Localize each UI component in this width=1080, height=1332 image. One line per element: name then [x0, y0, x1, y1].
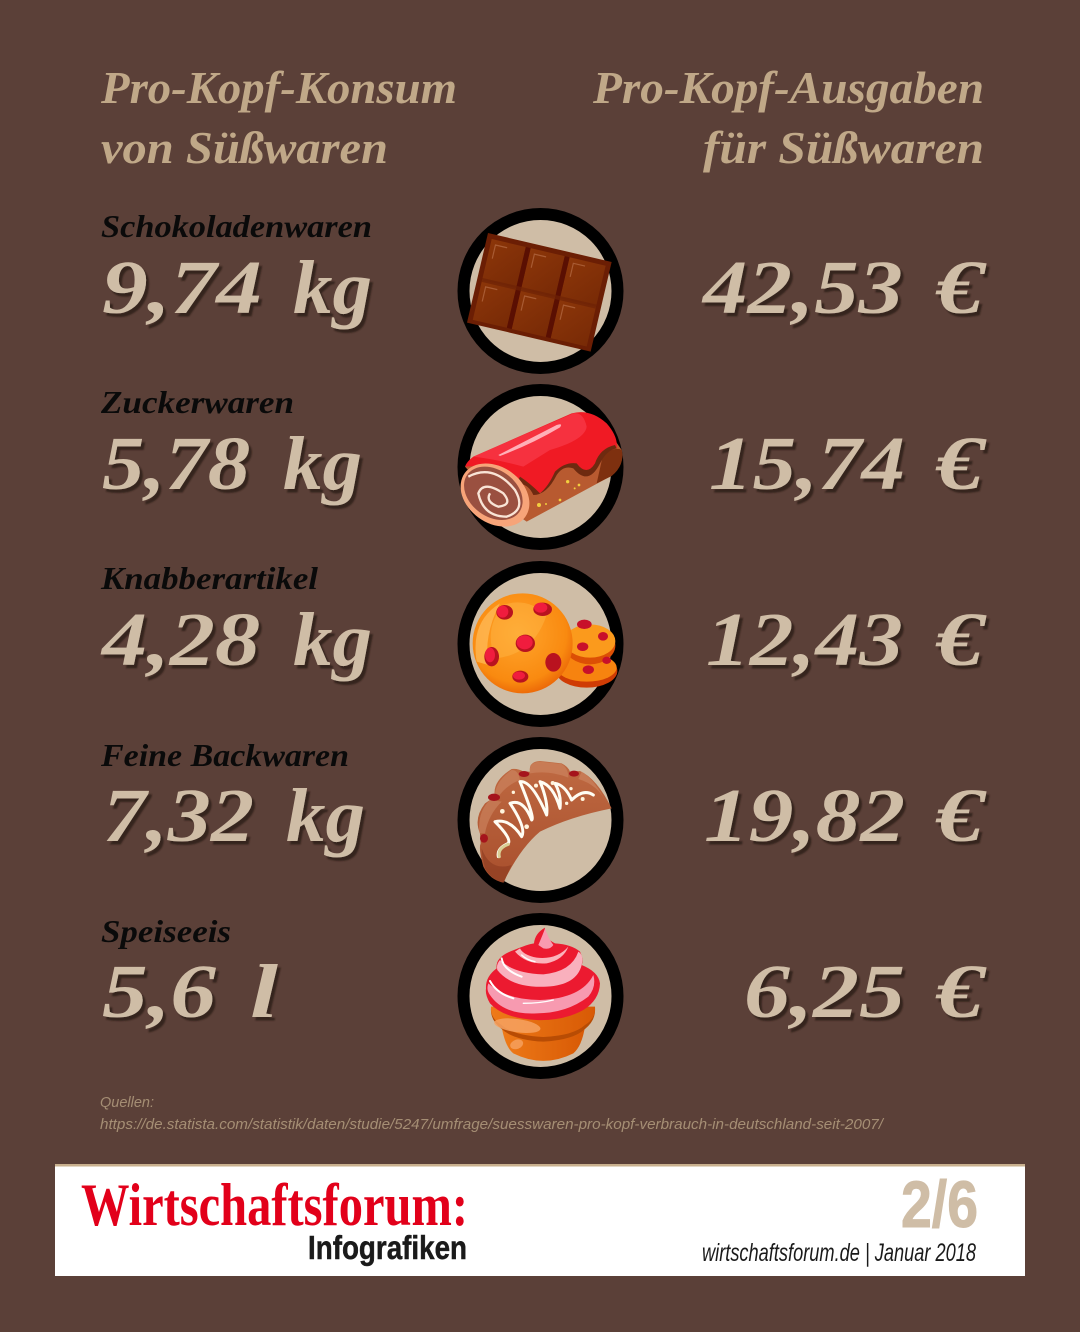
spending value: € — [935, 422, 988, 506]
consumption value — [102, 246, 372, 330]
icon: chocolate bar — [464, 214, 618, 368]
consumption value: kg — [283, 422, 362, 506]
icon: pastry — [464, 743, 618, 897]
spending value — [704, 774, 988, 858]
spending value: € — [935, 246, 988, 330]
spending value — [701, 246, 988, 330]
spending value: 15,74 — [709, 422, 905, 506]
spending value: € — [935, 598, 988, 682]
subtitle: Infografiken — [308, 1229, 467, 1266]
heading: spending: Pro-Kopf-Ausgaben — [592, 62, 984, 113]
page number: 2/6 — [901, 1167, 978, 1241]
consumption value: kg — [293, 598, 372, 682]
heading: consumption: von Süßwaren — [101, 122, 388, 173]
consumption value — [100, 598, 372, 682]
sources: https://de.statista.com/statistik/daten/studie/5247/umfrage/suesswaren-pro-kopf-verbrauch-in-deutschland-seit-2007/ — [100, 1116, 885, 1133]
heading: spending: für Süßwaren — [703, 122, 984, 173]
row: Speiseeis — [101, 913, 988, 1073]
label: Zuckerwaren — [100, 384, 294, 420]
sources: Quellen: — [100, 1094, 154, 1111]
spending value: 12,43 — [706, 598, 903, 682]
spending value — [744, 950, 988, 1034]
footer panel — [55, 1164, 1025, 1276]
spending value: 42,53 — [701, 246, 903, 330]
consumption value — [102, 950, 278, 1034]
spending value: 19,82 — [704, 774, 905, 858]
heading: consumption: Pro-Kopf-Konsum — [100, 62, 457, 113]
consumption value: kg — [293, 246, 372, 330]
label: Schokoladenwaren — [101, 208, 372, 244]
sources — [100, 1094, 885, 1133]
consumption value — [102, 422, 362, 506]
row: Feine Backwaren — [100, 737, 988, 897]
heading: consumption — [100, 62, 457, 173]
consumption value: l — [250, 950, 278, 1034]
label: Knabberartikel — [100, 560, 318, 596]
consumption value: kg — [286, 774, 365, 858]
label: Speiseeis — [101, 913, 231, 949]
row: Knabberartikel — [100, 560, 988, 721]
spending value: € — [935, 774, 988, 858]
website and date: wirtschaftsforum.de | Januar 2018 — [702, 1239, 976, 1267]
row: Zuckerwaren — [100, 384, 988, 544]
consumption value: 7,32 — [103, 774, 254, 858]
spending value: 6,25 — [744, 950, 905, 1034]
icon: jam roll — [448, 390, 622, 544]
spending value: € — [935, 950, 988, 1034]
consumption value: 9,74 — [102, 246, 262, 330]
heading: spending — [592, 62, 984, 173]
consumption value: 4,28 — [100, 598, 260, 682]
spending value — [706, 598, 988, 682]
consumption value: 5,78 — [102, 422, 250, 506]
spending value — [709, 422, 988, 506]
icon: ice cream cup — [464, 919, 618, 1073]
label: Feine Backwaren — [100, 737, 349, 773]
brand name: Wirtschaftsforum: — [81, 1172, 468, 1238]
consumption value: 5,6 — [102, 950, 216, 1034]
row: Schokoladenwaren — [101, 208, 988, 368]
icon: cookies — [464, 567, 618, 721]
consumption value — [103, 774, 365, 858]
